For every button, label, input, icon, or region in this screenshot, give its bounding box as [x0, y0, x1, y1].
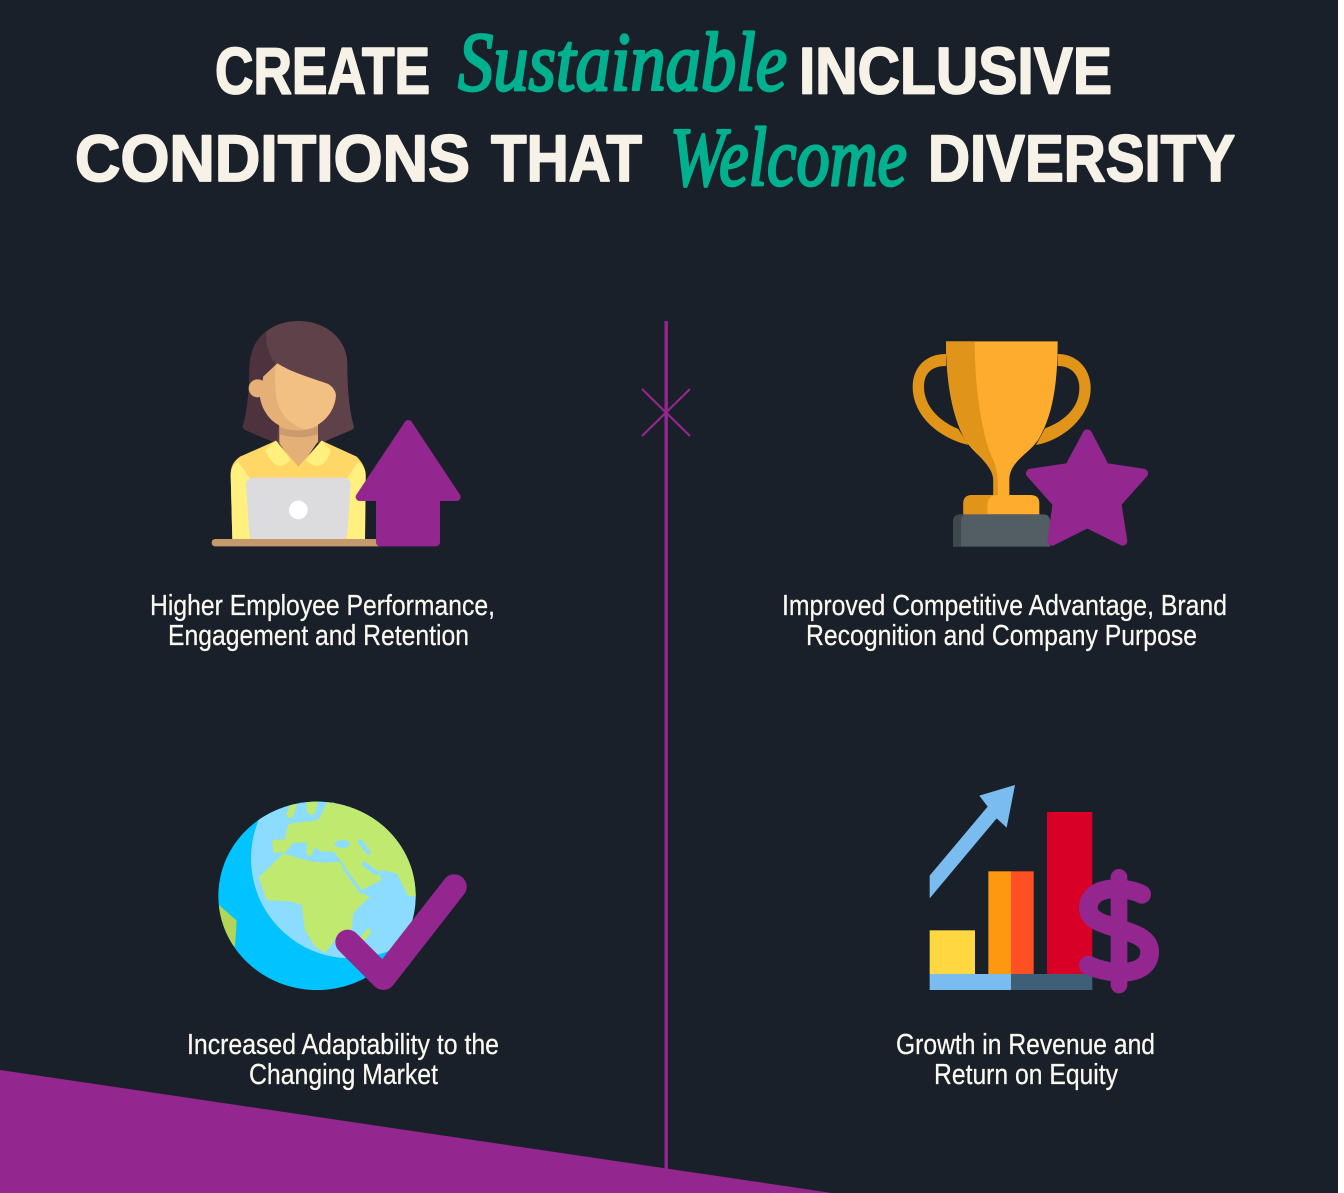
icon: bar chart with arrow and dollar sign: [930, 785, 1150, 990]
caption: competitive advantage: Recognition and Company Purpose: [806, 620, 1197, 652]
title line 1: CREATE: [215, 34, 430, 108]
title: [75, 16, 1235, 204]
title line 2: DIVERSITY: [928, 121, 1235, 195]
caption: employee performance: Higher Employee Performance,: [150, 590, 495, 622]
title line 1: Sustainable: [458, 16, 787, 109]
title line 1: [215, 16, 1112, 109]
title line 2: CONDITIONS: [75, 121, 470, 195]
caption: adaptability: [187, 1029, 499, 1091]
caption: adaptability: Changing Market: [249, 1059, 438, 1091]
title line 2: [75, 111, 1235, 204]
icon: trophy with star: [913, 341, 1143, 547]
purple corner wedge: [0, 1070, 832, 1193]
caption: revenue growth: Return on Equity: [934, 1059, 1118, 1091]
caption: revenue growth: [896, 1029, 1155, 1091]
icon: employee with laptop and up arrow: [212, 321, 457, 546]
caption: employee performance: [150, 590, 495, 652]
caption: adaptability: Increased Adaptability to the: [187, 1029, 499, 1061]
caption: employee performance: Engagement and Retention: [168, 620, 469, 652]
title line 1: INCLUSIVE: [799, 34, 1112, 108]
caption: revenue growth: Growth in Revenue and: [896, 1029, 1155, 1061]
caption: competitive advantage: Improved Competitive Advantage, Brand: [782, 590, 1227, 622]
central divider with cross: [642, 321, 690, 1170]
caption: competitive advantage: [782, 590, 1227, 652]
icon: globe with check mark: [218, 802, 467, 990]
title line 2: THAT: [491, 121, 642, 195]
title line 2: Welcome: [670, 111, 907, 204]
